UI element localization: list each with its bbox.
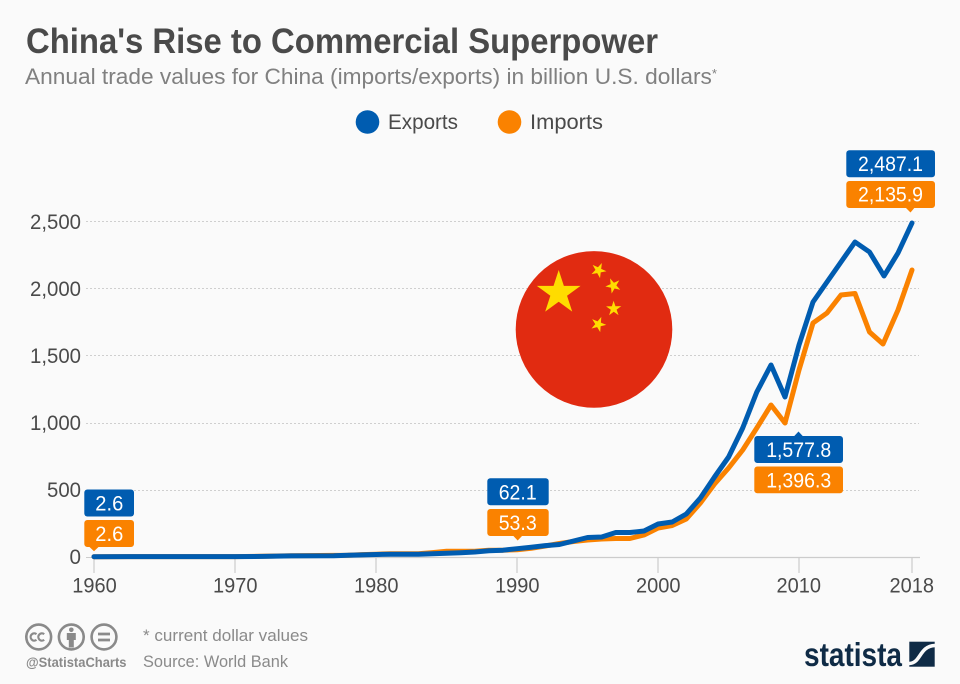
x axis: 1980 xyxy=(354,574,399,598)
callout: 2018 values: 2,135.9 xyxy=(858,182,923,206)
x axis: 1990 xyxy=(495,574,540,598)
source: Source: World Bank xyxy=(143,652,288,671)
legend: exports: Exports xyxy=(388,110,458,134)
title: China's Rise to Commercial Superpower xyxy=(26,22,658,61)
y axis grid and labels: 500 xyxy=(47,478,81,502)
subtitle: * xyxy=(712,66,717,81)
footnote: * current dollar values xyxy=(143,626,308,645)
callout: 1960 values: 2.6 xyxy=(95,522,123,546)
x axis: 1960 xyxy=(72,574,117,598)
x axis: 2018 xyxy=(890,574,934,598)
x axis: 1970 xyxy=(213,574,258,598)
line: imports xyxy=(94,270,912,557)
callout: 1990 values: 62.1 xyxy=(499,480,537,504)
x axis: 2000 xyxy=(636,574,681,598)
y axis grid and labels: 2,000 xyxy=(30,277,81,301)
x axis xyxy=(72,557,934,598)
x axis: 2010 xyxy=(776,574,821,598)
logo: statista: statista xyxy=(804,636,903,673)
icon: China flag circle xyxy=(516,251,672,408)
line chart xyxy=(30,150,935,598)
legend: imports: Imports xyxy=(530,110,603,134)
y axis grid and labels: 2,500 xyxy=(30,210,81,234)
subtitle: Annual trade values for China (imports/exports) in billion U.S. dollars xyxy=(25,64,707,89)
callout: 2010 values: 1,396.3 xyxy=(766,468,831,492)
callout: 1960 values: 2.6 xyxy=(95,492,123,516)
callout: 2018 values: 2,487.1 xyxy=(858,152,923,176)
legend xyxy=(356,110,603,134)
callout: 1990 values: 53.3 xyxy=(499,511,537,535)
y axis grid and labels xyxy=(30,210,919,569)
callout: 2010 values: 1,577.8 xyxy=(766,438,831,462)
callout: 1990 values xyxy=(487,478,549,540)
callout: 2018 values xyxy=(846,150,935,212)
y axis grid and labels: 1,500 xyxy=(30,344,81,368)
icon: creative commons licence xyxy=(26,625,116,649)
callout: 2010 values xyxy=(754,432,843,493)
legend: exports xyxy=(356,110,458,134)
legend: imports xyxy=(498,110,603,134)
line: exports xyxy=(94,223,912,557)
callout: 1960 values xyxy=(84,490,134,551)
y axis grid and labels: 0 xyxy=(70,545,81,569)
handle: @StatistaCharts xyxy=(26,654,127,670)
y axis grid and labels: 1,000 xyxy=(30,411,81,435)
